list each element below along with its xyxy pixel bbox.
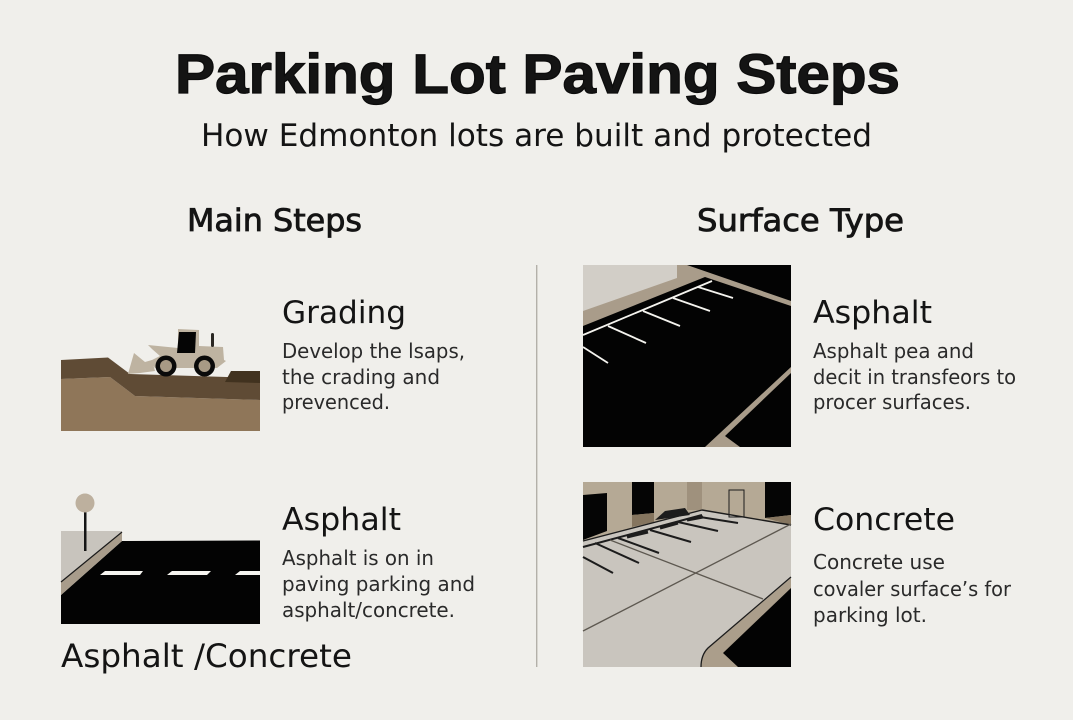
text: grading: Develop the lsaps, — [282, 339, 465, 363]
text: asphalt step: paving parking and — [282, 572, 475, 596]
text: grading — [282, 295, 465, 414]
subtitle: How Edmonton lots are built and protected — [201, 118, 872, 154]
title: Parking Lot Paving Steps — [175, 42, 900, 105]
text: grading: the crading and — [282, 365, 440, 389]
text: concrete surface: Concrete use — [813, 550, 945, 574]
text: asphalt step — [282, 502, 475, 622]
text: asphalt surface: procer surfaces. — [813, 390, 971, 414]
text: concrete surface: covaler surface’s for — [813, 577, 1012, 601]
wheel: rear — [194, 356, 215, 376]
text: concrete surface: parking lot. — [813, 603, 927, 627]
heading: main steps: Main Steps — [187, 203, 362, 239]
text: concrete surface — [813, 502, 1012, 627]
text: grading: prevenced. — [282, 390, 390, 414]
illustration: asphalt road with sign — [61, 494, 260, 624]
text: grading: Grading — [282, 295, 406, 331]
illustration: grading bulldozer — [61, 329, 260, 431]
text: concrete surface: Concrete — [813, 502, 955, 538]
text: asphalt surface: decit in transfeors to — [813, 365, 1016, 389]
text: asphalt surface: Asphalt pea and — [813, 339, 974, 363]
text: asphalt step: asphalt/concrete. — [282, 598, 455, 622]
illustration: asphalt parking lot — [583, 265, 791, 447]
label: asphalt / concrete: Asphalt /Concrete — [61, 637, 352, 675]
text: asphalt step: Asphalt is on in — [282, 546, 434, 570]
wheel: front — [156, 356, 176, 376]
text: asphalt surface: Asphalt — [813, 295, 932, 331]
text: asphalt step: Asphalt — [282, 502, 401, 538]
text: asphalt surface — [813, 295, 1016, 414]
heading: surface type: Surface Type — [697, 203, 904, 239]
illustration: concrete parking lot — [583, 482, 791, 667]
